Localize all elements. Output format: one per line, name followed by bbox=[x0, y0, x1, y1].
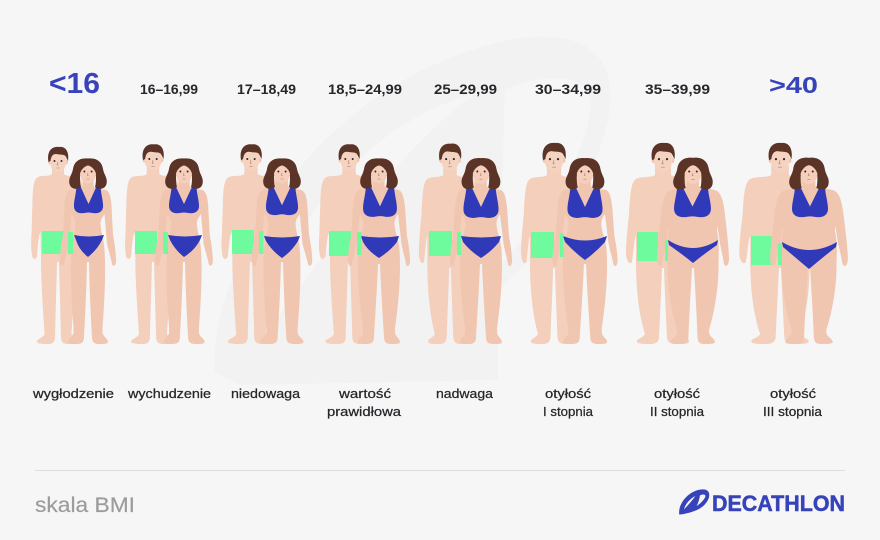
figures: otyłość II stopnia bbox=[626, 143, 729, 344]
label: otyłość II stopnia bbox=[650, 386, 705, 419]
figures: otyłość I stopnia bbox=[521, 143, 618, 344]
label: otyłość II stopnia: otyłość bbox=[654, 386, 701, 401]
label: wychudzenie: wychudzenie bbox=[127, 386, 211, 401]
watermark logo bbox=[214, 37, 611, 385]
label: wartość prawidłowa bbox=[327, 386, 402, 419]
label: wartość prawidłowa: wartość bbox=[338, 386, 392, 401]
label: otyłość I stopnia: otyłość bbox=[545, 386, 592, 401]
BMI range: below 16: <16 bbox=[49, 68, 100, 100]
label: otyłość III stopnia: otyłość bbox=[770, 386, 817, 401]
label: nadwaga: nadwaga bbox=[436, 386, 494, 401]
BMI range: 18,5–24,99: 18,5–24,99 bbox=[328, 82, 402, 97]
wordmark: DECATHLON bbox=[712, 491, 845, 516]
figures: otyłość III stopnia bbox=[739, 143, 848, 344]
label: wygłodzenie: wygłodzenie bbox=[32, 386, 114, 401]
BMI range: 17–18,49: 17–18,49 bbox=[237, 82, 296, 97]
label: wartość prawidłowa: prawidłowa bbox=[327, 404, 402, 419]
figures: wychudzenie bbox=[125, 144, 213, 344]
label: otyłość I stopnia: I stopnia bbox=[543, 404, 594, 419]
icon: Decathlon mark bbox=[679, 489, 709, 515]
BMI range: 30–34,99: 30–34,99 bbox=[535, 82, 601, 97]
figures: wartość prawidłowa bbox=[319, 144, 410, 344]
BMI range: 16–16,99: 16–16,99 bbox=[140, 82, 198, 97]
label: otyłość I stopnia bbox=[543, 386, 594, 419]
figures: nadwaga bbox=[419, 144, 512, 344]
BMI range: 35–39,99: 35–39,99 bbox=[645, 82, 710, 97]
figures: niedowaga bbox=[221, 144, 312, 344]
BMI range: above 40: >40 bbox=[769, 72, 818, 98]
label: otyłość III stopnia: III stopnia bbox=[763, 404, 823, 419]
Decathlon logo bbox=[679, 489, 845, 516]
figures: wygłodzenie bbox=[31, 147, 116, 344]
label: otyłość II stopnia: II stopnia bbox=[650, 404, 705, 419]
footer title: skala BMI bbox=[35, 494, 135, 517]
BMI range: 25–29,99: 25–29,99 bbox=[434, 82, 497, 97]
label: otyłość III stopnia bbox=[763, 386, 823, 419]
label: niedowaga: niedowaga bbox=[231, 386, 301, 401]
